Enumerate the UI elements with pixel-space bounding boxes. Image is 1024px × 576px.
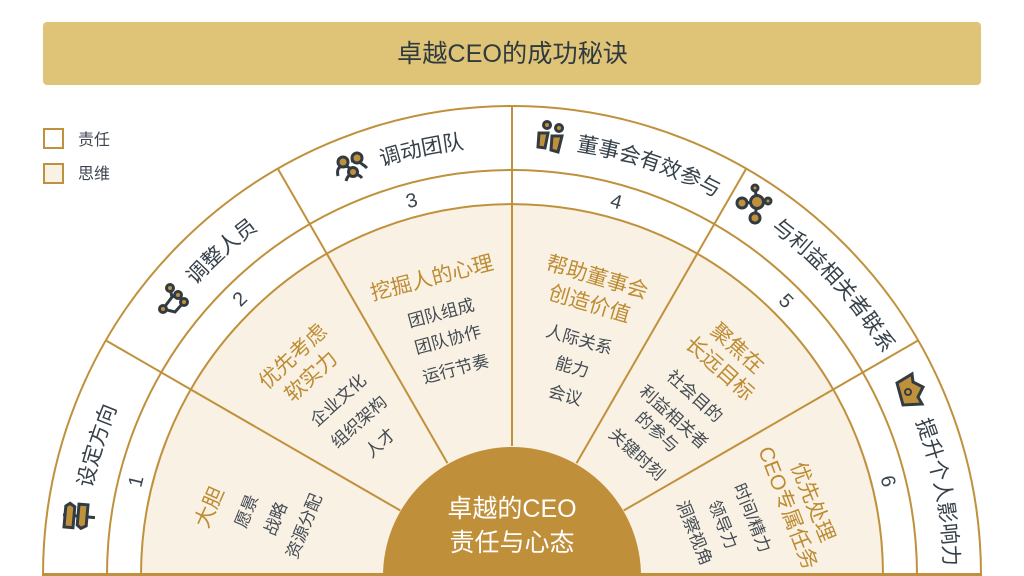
sector 4 content: 帮助董事会 — [543, 252, 651, 304]
sector 6 content — [673, 444, 839, 573]
sector 5 content: 聚焦在 — [706, 319, 768, 378]
sector 4 content: 创造价值 — [546, 281, 633, 327]
title banner: 卓越CEO的成功秘诀 — [397, 40, 628, 68]
semicircle wheel structure — [42, 106, 982, 575]
center hub — [383, 447, 641, 576]
number 6: 6 — [881, 476, 896, 486]
sector 3 content: 团队组成 — [406, 295, 476, 331]
sector 3 header: 调动团队: 调动团队 — [380, 132, 464, 166]
icon: crown — [897, 374, 923, 405]
sector 5 content: 社会目的 — [663, 367, 726, 426]
icon: org tree — [160, 284, 188, 312]
icon: signpost — [62, 503, 96, 530]
sector 1 content — [191, 484, 326, 561]
sector 4 content: 人际关系 — [544, 321, 614, 358]
sector 2 content — [255, 320, 399, 462]
sector 2 content: 人才 — [361, 425, 399, 462]
sector 1 content: 愿景 — [232, 492, 262, 531]
sector 5 content: 关键时刻 — [605, 425, 668, 484]
number 3: 3 — [406, 193, 417, 208]
legend: mindset: 思维 — [78, 165, 110, 183]
icon: team — [338, 153, 367, 181]
sector 6 content: 洞察视角 — [673, 498, 716, 568]
number 1: 1 — [128, 478, 144, 487]
sector 6 content: 优先处理 — [786, 459, 839, 545]
center hub: 卓越的CEO — [447, 495, 577, 523]
sector 2 content: 优先考虑 — [255, 320, 332, 394]
sector 3 content: 挖掘人的心理 — [368, 251, 496, 305]
legend: responsibility: 责任 — [78, 131, 110, 149]
number 2: 2 — [233, 292, 248, 307]
sector 3 content: 团队协作 — [413, 322, 483, 358]
sector 1 content: 战略 — [261, 500, 291, 538]
title banner — [43, 22, 981, 85]
sector 3 content: 运行节奏 — [421, 351, 491, 387]
sector 5 header: 与利益相关者联系: 与利益相关者联系 — [774, 218, 896, 352]
sector 4 content: 会议 — [546, 382, 584, 409]
legend — [44, 129, 110, 183]
sector 5 content — [605, 319, 768, 484]
icon: stakeholder network — [737, 185, 771, 223]
sector 2 content: 企业文化 — [307, 371, 370, 430]
sector 6 content: CEO专属任务 — [753, 444, 821, 573]
sector 1 header: 设定方向: 设定方向 — [76, 404, 117, 486]
center hub: 责任与心态 — [449, 529, 575, 557]
sector 2 content: 软实力 — [281, 347, 342, 407]
sector 4 header: 董事会有效参与: 董事会有效参与 — [577, 134, 720, 196]
sector 5 content: 的参与 — [632, 408, 682, 456]
sector 3 content — [368, 251, 496, 387]
sector 4 content — [543, 252, 651, 409]
number 5: 5 — [780, 293, 794, 308]
sector 1 content: 大胆 — [191, 484, 229, 531]
number 4: 4 — [610, 195, 622, 209]
sector 6 header: 提升个人影响力: 提升个人影响力 — [915, 418, 962, 564]
sector 1 content: 资源分配 — [283, 491, 326, 561]
sector 5 content: 长远目标 — [680, 332, 758, 405]
icon: board members — [538, 122, 562, 152]
sector 6 content: 领导力 — [704, 497, 741, 552]
sector 2 content: 组织架构 — [327, 392, 391, 452]
sector 5 content: 利益相关者 — [636, 382, 712, 453]
sector 4 content: 能力 — [553, 353, 591, 381]
sector 6 content: 时间/精力 — [730, 481, 775, 555]
sector 2 header: 调整人员: 调整人员 — [185, 218, 258, 284]
